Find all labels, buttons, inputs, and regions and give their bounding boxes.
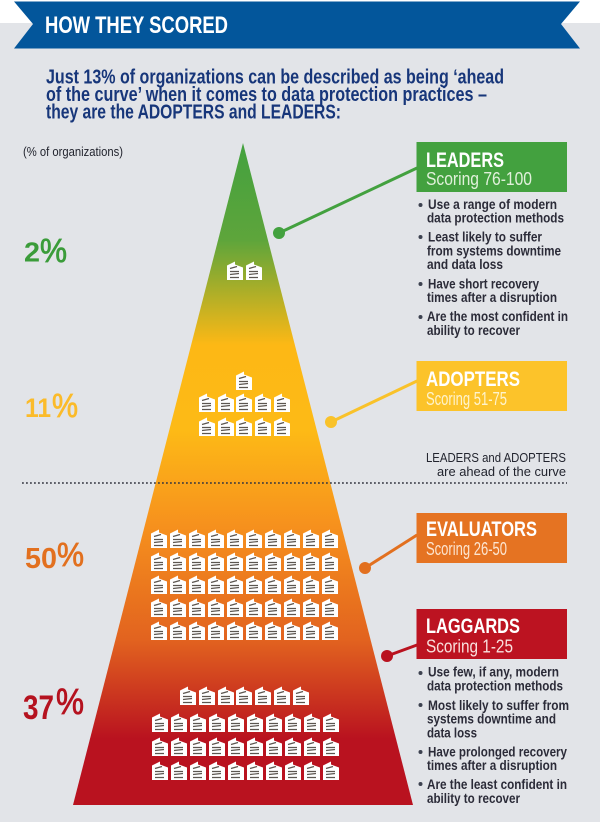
list: laggards traits: data loss bbox=[427, 725, 477, 740]
panel: adopters bbox=[416, 361, 567, 411]
percentage: evaluators: 50 bbox=[25, 543, 57, 575]
panel: leaders: LEADERS bbox=[426, 149, 504, 172]
percentage: leaders: 2 bbox=[24, 236, 40, 268]
buildings: laggards bbox=[152, 686, 339, 780]
list: laggards traits: Have prolonged recovery bbox=[428, 745, 567, 760]
intro heading bbox=[46, 66, 504, 124]
percentage: leaders: % bbox=[40, 232, 67, 269]
panel: adopters: Scoring 51-75 bbox=[426, 388, 507, 409]
title: HOW THEY SCORED bbox=[45, 12, 228, 39]
percentage: laggards: 37 bbox=[23, 689, 54, 727]
buildings: leaders bbox=[227, 262, 262, 280]
percentage: adopters bbox=[25, 387, 78, 424]
percentage: leaders bbox=[24, 232, 67, 269]
list: leaders traits bbox=[418, 197, 568, 338]
connector: laggards bbox=[381, 645, 417, 662]
panel: adopters: ADOPTERS bbox=[426, 368, 520, 391]
percentage: evaluators bbox=[25, 536, 84, 575]
list: laggards traits: Are the least confident in bbox=[427, 777, 567, 792]
list: leaders traits: ability to recover bbox=[427, 323, 521, 338]
percentage: adopters: % bbox=[52, 387, 78, 424]
panel: laggards bbox=[416, 609, 567, 659]
panel: leaders: Scoring 76-100 bbox=[426, 168, 532, 189]
list: laggards traits: systems downtime and bbox=[427, 712, 556, 727]
note: ahead of the curve bbox=[426, 451, 566, 479]
list: leaders traits: and data loss bbox=[427, 257, 503, 272]
panel: laggards: LAGGARDS bbox=[426, 615, 520, 638]
list: leaders traits: data protection methods bbox=[427, 211, 564, 226]
pyramid bbox=[73, 143, 413, 805]
list: laggards traits: ability to recover bbox=[427, 791, 521, 806]
list: laggards traits: Use few, if any, modern bbox=[428, 665, 559, 680]
intro heading: of the curve’ when it comes to data protection practices – bbox=[46, 84, 487, 106]
note: ahead of the curve: are ahead of the curve bbox=[437, 465, 566, 479]
list: leaders traits: from systems downtime bbox=[427, 244, 561, 259]
percentage: laggards: % bbox=[56, 681, 84, 722]
connector: leaders bbox=[273, 168, 417, 239]
list: laggards traits: times after a disruption bbox=[427, 758, 557, 773]
intro heading: they are the ADOPTERS and LEADERS: bbox=[46, 102, 341, 124]
list: leaders traits: times after a disruption bbox=[427, 290, 557, 305]
title banner bbox=[14, 2, 580, 48]
connector: evaluators bbox=[359, 535, 417, 574]
percentage: laggards bbox=[23, 681, 84, 727]
note: ahead of the curve: LEADERS and ADOPTERS bbox=[426, 451, 566, 465]
percentage: adopters: 11 bbox=[25, 393, 51, 423]
panel: evaluators: EVALUATORS bbox=[426, 518, 537, 541]
list: laggards traits: Most likely to suffer from bbox=[428, 698, 569, 713]
divider: ahead of the curve bbox=[22, 482, 567, 484]
buildings: adopters bbox=[199, 372, 290, 436]
list: leaders traits: Least likely to suffer bbox=[428, 230, 543, 245]
percentage: evaluators: % bbox=[57, 536, 84, 573]
list: leaders traits: Use a range of modern bbox=[428, 197, 557, 212]
panel: leaders bbox=[416, 142, 567, 192]
buildings: evaluators bbox=[151, 530, 338, 640]
list: laggards traits: data protection methods bbox=[427, 679, 563, 694]
list: leaders traits: Are the most confident in bbox=[427, 309, 568, 324]
panel: laggards: Scoring 1-25 bbox=[426, 636, 513, 657]
list: leaders traits: Have short recovery bbox=[428, 277, 539, 292]
panel: evaluators: Scoring 26-50 bbox=[426, 538, 507, 559]
connector: adopters bbox=[325, 381, 417, 428]
list: laggards traits bbox=[418, 665, 569, 806]
panel: evaluators bbox=[416, 513, 567, 563]
axis note: (% of organizations) bbox=[23, 145, 123, 159]
